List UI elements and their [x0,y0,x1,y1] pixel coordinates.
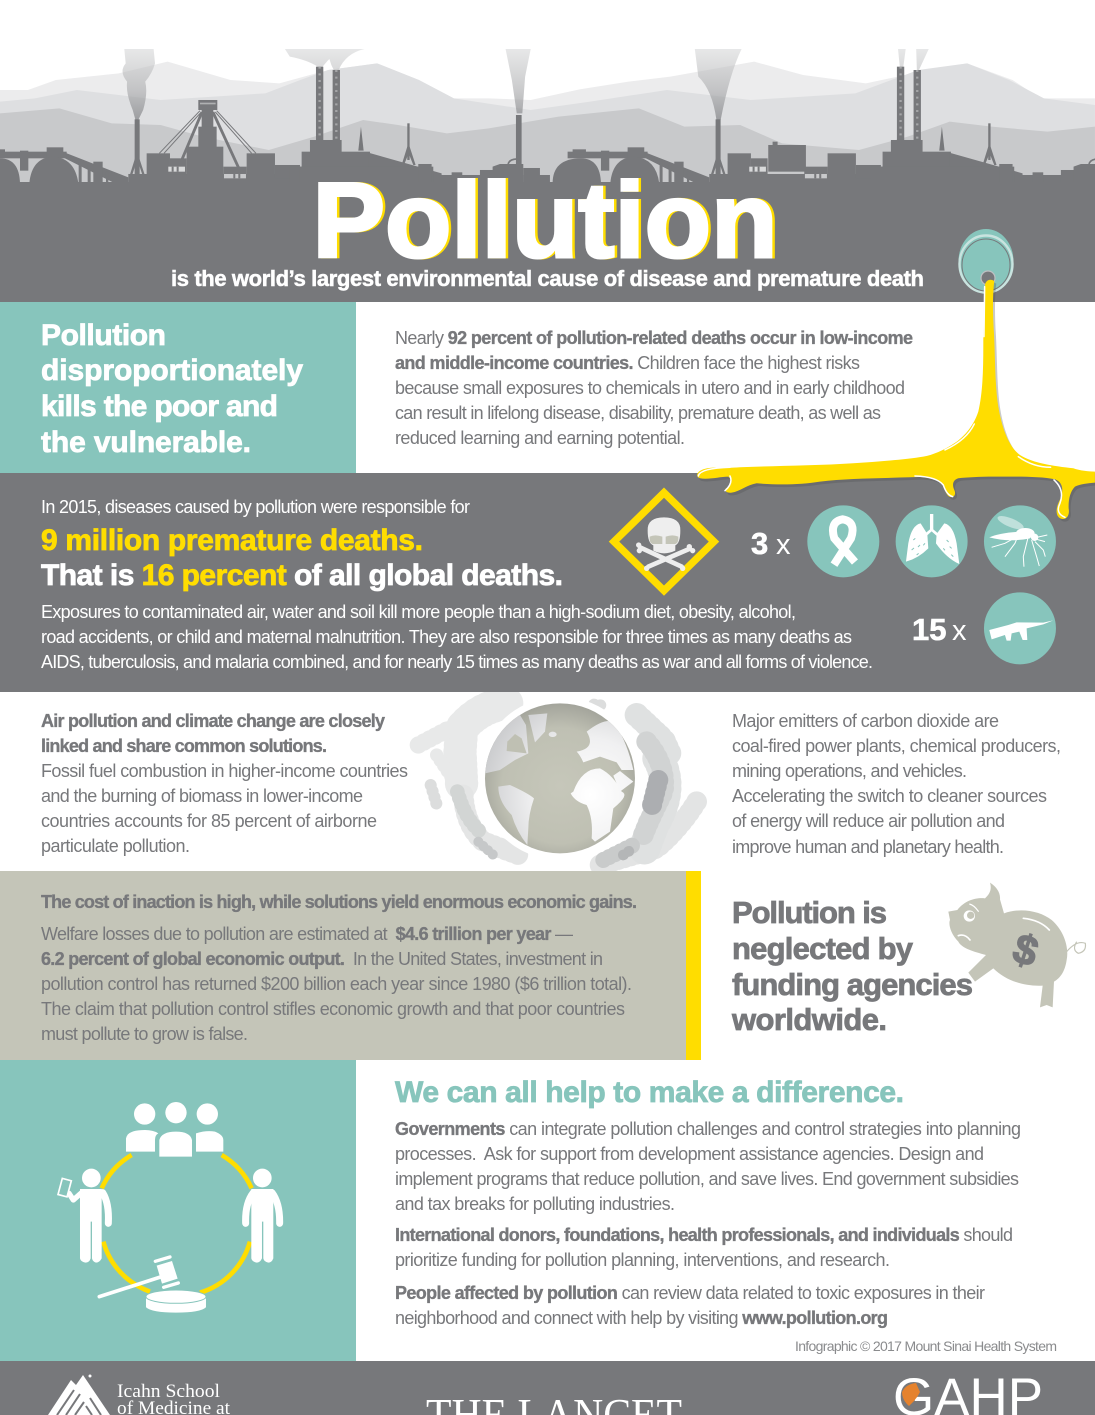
gavel [99,1257,206,1313]
panel: poor and vulnerable [0,302,356,473]
header grey band [0,182,1095,302]
yellow spill [697,280,1095,522]
header mountains and smoke [0,49,1095,183]
text block: major emitters: coal-fired power plants, chemical producers, [732,736,1061,756]
panel: cost of inaction: 6.2 percent of global economic output. In the United States, investment in [41,949,603,969]
text block: 92 percent [395,328,913,448]
icon: sad piggy bank: $ [1007,924,1044,976]
heading: we can all help: We can all help to make a difference. [395,1076,904,1109]
factory skyline [0,67,1095,183]
logo: Icahn School of Medicine: Icahn School [117,1381,220,1402]
text block: major emitters: of energy will reduce air pollution and [732,811,1005,831]
text block: calls to action: and tax breaks for polluting industries. [395,1194,675,1214]
text block: 92 percent: and middle-income countries. Children face the highest risks [395,353,860,373]
text block: air pollution and climate: Fossil fuel combustion in higher-income countries [41,761,408,781]
text block: air pollution and climate [41,711,408,856]
footer band [0,1361,1095,1415]
person [246,1169,280,1263]
icon: skull warning diamond [614,493,714,591]
text block: 92 percent: because small exposures to chemicals in utero and in early childhood [395,378,905,398]
panel: cost of inaction [0,871,701,1060]
panel: poor and vulnerable: the vulnerable. [41,426,251,459]
icon: spilling barrel [958,229,1014,293]
panel: cost of inaction: pollution control has returned $200 billion each year since 1980 ($6 trillion total). [41,974,632,994]
panel: cost of inaction: The cost of inaction is high, while solutions yield enormous economic gains. [41,892,637,912]
text block: 92 percent: reduced learning and earning potential. [395,428,685,448]
panel: cost of inaction: The claim that pollution control stifles economic growth and that poor countries [41,999,625,1019]
panel: 9 million premature deaths: In 2015, diseases caused by pollution were responsible for [41,497,470,517]
text block: major emitters: improve human and planetary health. [732,837,1004,857]
subtitle: is the world’s largest environmental cause of disease and premature death [171,266,924,291]
person with money [58,1169,108,1263]
title: Pollution [315,160,780,280]
heading: neglected by funding agencies: funding agencies [732,967,973,1002]
heading: neglected by funding agencies: neglected by [732,931,914,966]
heading: neglected by funding agencies: Pollution is [732,895,887,930]
panel: 9 million premature deaths: 9 million premature deaths. [41,524,423,557]
text block: calls to action: neighborhood and connect with help by visiting www.pollution.org [395,1308,888,1328]
text block: 92 percent: Nearly 92 percent of pollution-related deaths occur in low-income [395,328,913,348]
text block: calls to action: implement programs that reduce pollution, and save lives. End government subsidies [395,1169,1019,1189]
text block: air pollution and climate: Air pollution and climate change are closely [41,711,385,731]
icon: rifle [984,592,1056,664]
text block: calls to action: processes. Ask for support from development assistance agencies. Design and [395,1144,984,1164]
text block: air pollution and climate: particulate pollution. [41,836,190,856]
text block: major emitters [732,711,1061,857]
text block: major emitters: Accelerating the switch to cleaner sources [732,786,1047,806]
label: 15 x: x [952,615,967,647]
text block: major emitters: mining operations, and vehicles. [732,761,967,781]
credit: Infographic © 2017 Mount Sinai Health System [795,1338,1057,1354]
panel: cost of inaction: Welfare losses due to pollution are estimated at $4.6 trillion per year — [41,924,573,944]
label: 3 x: 3 [751,526,768,561]
icon: ribbon [807,505,879,577]
panel: 9 million premature deaths: That is 16 percent of all global deaths. [41,559,563,592]
panel: 9 million premature deaths: Exposures to contaminated air, water and soil kill more people than a high-sodium diet, obesity, alcohol, [41,602,796,622]
icon: lungs [896,505,968,577]
text block: major emitters: Major emitters of carbon dioxide are [732,711,999,731]
panel: 9 million premature deaths: road accidents, or child and maternal malnutrition. They are also responsible for three times as many deaths as [41,627,852,647]
panel: 9 million premature deaths [0,473,1095,692]
text block: air pollution and climate: and the burning of biomass in lower-income [41,786,363,806]
text block: calls to action: People affected by pollution can review data related to toxic exposures in their [395,1283,985,1303]
icon: globe with smoke [418,697,697,865]
title: Pollution [312,160,778,280]
heading: neglected by funding agencies [731,895,973,1037]
panel: poor and vulnerable: Pollution [41,319,166,352]
icon: mosquito [984,505,1056,577]
text block: calls to action: International donors, foundations, health professionals, and individuals should [395,1225,1013,1245]
text block: calls to action [395,1119,1021,1328]
panel: poor and vulnerable: kills the poor and [41,390,278,423]
panel: 9 million premature deaths: AIDS, tuberculosis, and malaria combined, and for nearly 15 times as many deaths as war and all forms of violence. [41,652,873,672]
text block: calls to action: Governments can integrate pollution challenges and control strategies into planning [395,1119,1021,1139]
text block: 92 percent: can result in lifelong disease, disability, premature death, as well as [395,403,881,423]
people group [126,1102,223,1157]
panel: stakeholders [0,1060,356,1361]
panel: cost of inaction: must pollute to grow is false. [41,1024,248,1044]
text block: air pollution and climate: linked and share common solutions. [41,736,327,756]
panel: poor and vulnerable: disproportionately [41,354,303,387]
heading: neglected by funding agencies: worldwide. [731,1002,887,1037]
label: 3 x: x [776,529,791,561]
icon: sad piggy bank [948,883,1086,1007]
text block: air pollution and climate: countries accounts for 85 percent of airborne [41,811,377,831]
stakeholder ring [102,1155,252,1293]
label: 15 x: 15 [912,612,946,647]
text block: calls to action: prioritize funding for pollution planning, interventions, and research. [395,1250,890,1270]
logo: Icahn School of Medicine [48,1374,231,1415]
